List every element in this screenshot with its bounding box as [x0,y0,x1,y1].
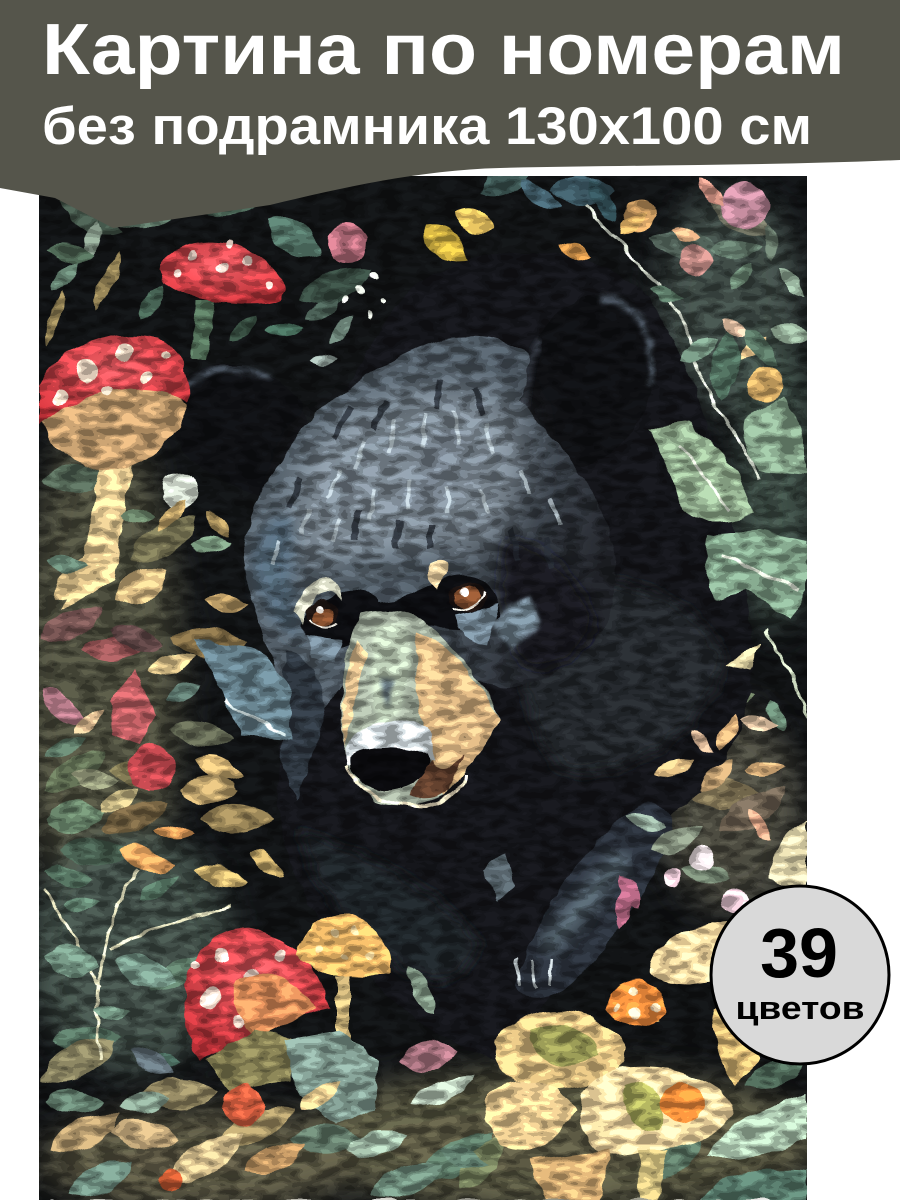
muzzle [342,609,500,805]
bottom mushrooms [484,922,808,1200]
paw [515,802,672,998]
nose [350,748,429,790]
brows [294,578,342,625]
header band [0,0,900,228]
red mushroom [185,928,330,1090]
filler leaves [33,183,795,1196]
mouth [346,765,465,806]
bottom foliage [43,961,490,1200]
badge: 39 colours [711,886,889,1064]
left flowers [35,472,292,1086]
bear face [294,559,500,806]
snout top [345,722,434,765]
title: Картина по номерам [42,10,845,90]
top mushroom [158,241,286,360]
foliage backdrop [20,190,820,1200]
fur strokes [274,410,560,564]
yellow mushroom [296,913,390,1045]
bear head [243,336,616,800]
painting: bear in a forest [39,176,807,1200]
bear ears [181,292,657,442]
badge caption: цветов [736,990,864,1026]
big ivy leaves [648,422,752,522]
right lower flowers [654,758,694,778]
left mushroom large [39,335,190,610]
bear body [278,252,753,1060]
under-eye patches [305,635,343,662]
top-right vines [585,175,814,932]
eyes [307,583,487,628]
subtitle: без подрамника 130х100 см [42,97,812,156]
badge number: 39 [760,914,838,992]
top foliage [37,162,621,368]
